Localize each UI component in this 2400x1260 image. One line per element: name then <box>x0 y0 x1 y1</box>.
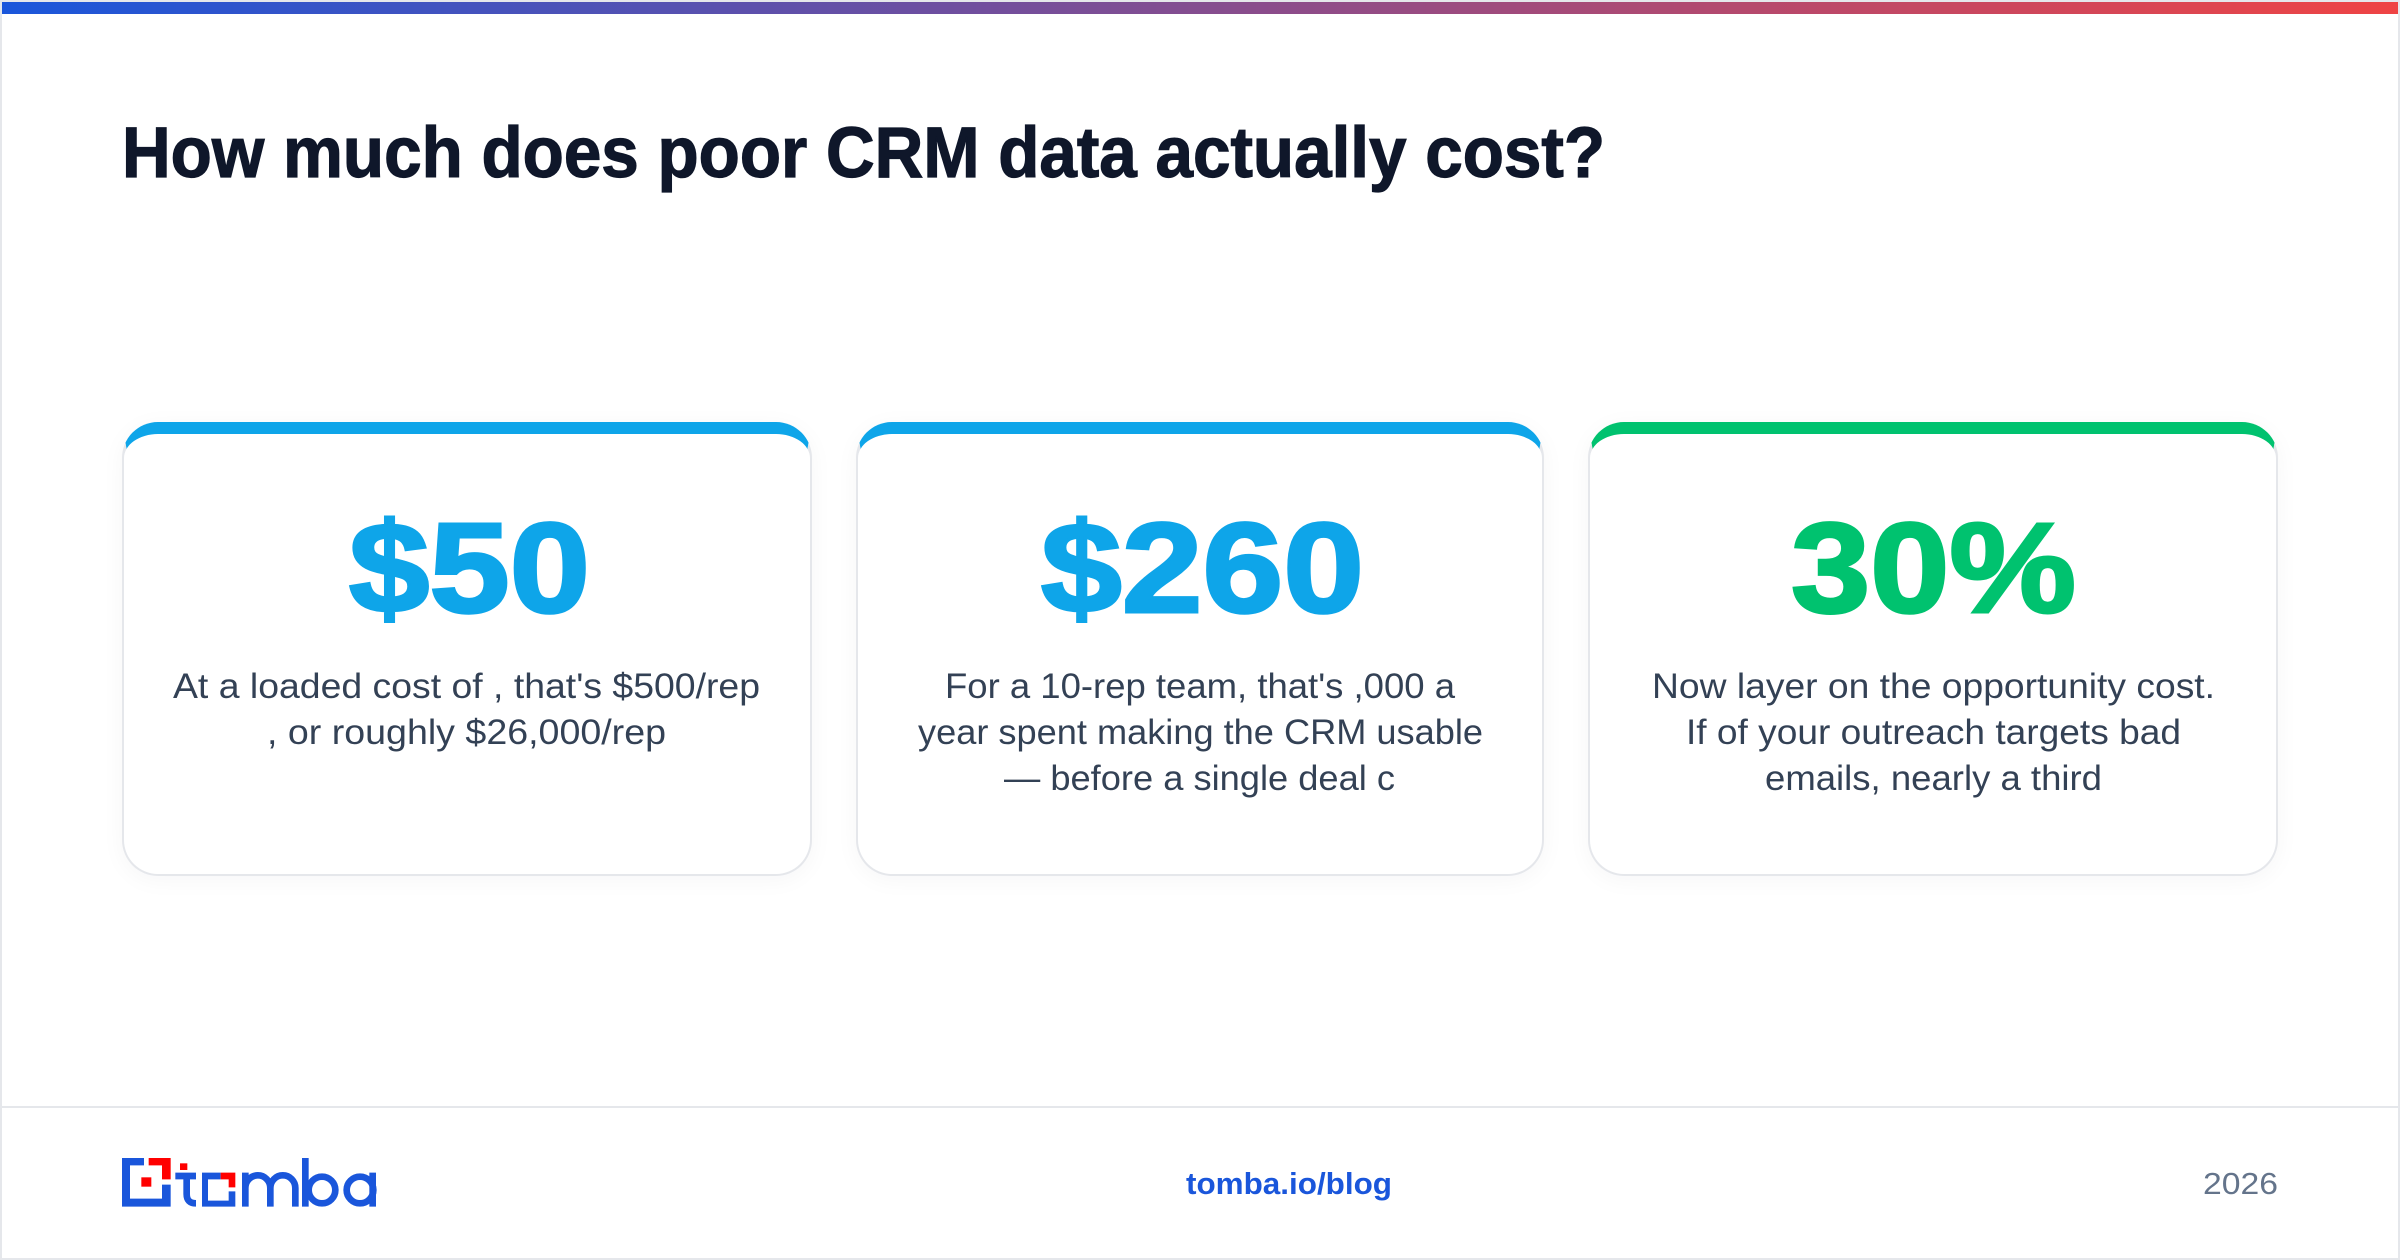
footer year: 2026 <box>2203 1166 2278 1201</box>
logo icon <box>122 1158 171 1207</box>
stat: $50: $50 <box>349 497 590 640</box>
description: $260 card: — before a single deal c <box>1004 759 1395 798</box>
title: How much does poor CRM data actually cost? <box>122 114 1605 193</box>
panel: $260 card <box>856 422 1544 876</box>
description: 30% card: Now layer on the opportunity cost. <box>1652 667 2215 706</box>
description: $260 card <box>918 667 1483 798</box>
panel: $50 card <box>122 422 812 876</box>
top gradient bar <box>2 2 2398 14</box>
stat: $260: $260 <box>1041 497 1364 640</box>
panel: 30% card <box>1588 422 2278 876</box>
logo: tomba <box>122 1158 377 1207</box>
logo wordmark <box>175 1158 373 1207</box>
description: $50 card: , or roughly $26,000/rep <box>267 713 666 752</box>
description: $260 card: year spent making the CRM usable <box>918 713 1483 752</box>
description: $50 card: At a loaded cost of , that's $500/rep <box>173 667 760 706</box>
description: $50 card <box>173 667 760 752</box>
description: 30% card <box>1652 667 2215 798</box>
footer link: tomba.io/blog <box>1186 1166 1392 1201</box>
description: $260 card: For a 10-rep team, that's ,000 a <box>945 667 1456 706</box>
description: 30% card: emails, nearly a third <box>1765 759 2102 798</box>
description: 30% card: If of your outreach targets bad <box>1686 713 2181 752</box>
stat: 30%: 30% <box>1791 497 2076 640</box>
